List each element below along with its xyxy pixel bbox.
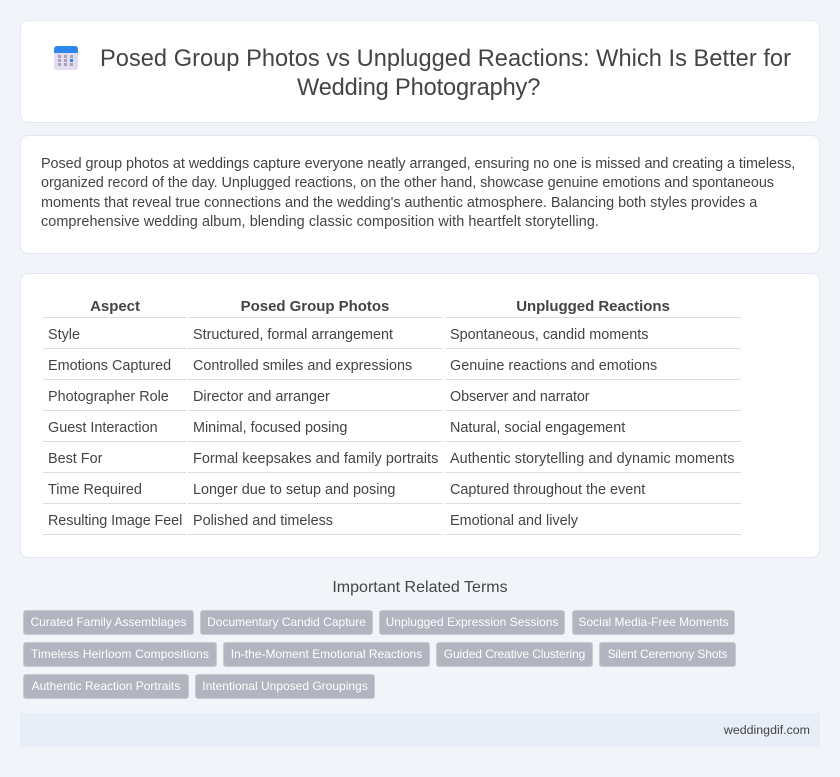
table row: best for: Best For — [48, 451, 102, 467]
table row: resulting image feel: Resulting Image Feel — [48, 513, 182, 529]
related terms tags: Guided Creative Clustering — [444, 647, 585, 661]
icon: calendar — [54, 46, 78, 70]
table row: emotions — [48, 358, 657, 374]
related terms tags: Timeless Heirloom Compositions — [31, 647, 209, 661]
intro paragraph: comprehensive wedding album, blending classic composition with heartfelt storytelling. — [41, 214, 599, 230]
table row: guest interaction — [48, 420, 626, 436]
table row: best for: Authentic storytelling and dynamic moments — [450, 451, 734, 467]
table row: best for — [48, 451, 734, 467]
intro paragraph: organized record of the day. Unplugged reactions, on the other hand, showcase genuine emotions and spontaneous — [41, 175, 774, 191]
table header: Unplugged Reactions — [516, 298, 670, 315]
table header: Posed Group Photos — [241, 298, 389, 315]
heading — [100, 46, 791, 101]
table row: guest interaction: Guest Interaction — [48, 420, 158, 436]
related terms tags: In-the-Moment Emotional Reactions — [231, 647, 422, 661]
related terms tags: Documentary Candid Capture — [207, 615, 366, 629]
heading: Posed Group Photos vs Unplugged Reactions: Which Is Better for — [100, 46, 791, 72]
table row: emotions: Genuine reactions and emotions — [450, 358, 657, 374]
related terms tags: Unplugged Expression Sessions — [386, 615, 558, 629]
related terms tags: Authentic Reaction Portraits — [32, 679, 180, 693]
table header: Aspect — [90, 298, 140, 315]
table row: time required: Captured throughout the event — [450, 482, 645, 498]
table row: resulting image feel — [48, 513, 578, 529]
table row: resulting image feel: Polished and timeless — [193, 513, 333, 529]
comparison table panel — [20, 273, 820, 558]
table row: best for: Formal keepsakes and family portraits — [193, 451, 438, 467]
heading: Wedding Photography? — [297, 75, 540, 101]
table row: style — [48, 327, 648, 343]
table row: style: Spontaneous, candid moments — [450, 327, 648, 343]
table row: guest interaction: Natural, social engagement — [450, 420, 625, 436]
related terms tags: Silent Ceremony Shots — [608, 647, 727, 661]
intro paragraph: Posed group photos at weddings capture everyone neatly arranged, ensuring no one is missed and creating a timeless, — [41, 156, 795, 172]
related terms heading: Important Related Terms — [332, 579, 508, 596]
table header — [90, 298, 670, 315]
intro paragraph: moments that reveal true connections and the wedding's authentic atmosphere. Balancing both styles provides a — [41, 195, 757, 211]
footer source: weddingdif.com — [724, 723, 810, 737]
related terms tags: Curated Family Assemblages — [30, 615, 187, 629]
table row: photographer role: Observer and narrator — [450, 389, 589, 405]
related terms tags: Social Media-Free Moments — [578, 615, 729, 629]
table row: style: Style — [48, 327, 80, 343]
footer — [20, 713, 820, 747]
table row: photographer role: Director and arranger — [193, 389, 330, 405]
related terms tags: Intentional Unposed Groupings — [202, 679, 368, 693]
table row: resulting image feel: Emotional and lively — [450, 513, 578, 529]
table row: photographer role: Photographer Role — [48, 389, 169, 405]
table row: emotions: Emotions Captured — [48, 358, 171, 374]
table row: time required — [48, 482, 646, 498]
table row: time required: Longer due to setup and posing — [193, 482, 395, 498]
intro text panel — [20, 135, 820, 254]
table row: guest interaction: Minimal, focused posing — [193, 420, 347, 436]
table row: style: Structured, formal arrangement — [193, 327, 393, 343]
title card — [20, 20, 820, 123]
table row: time required: Time Required — [48, 482, 142, 498]
intro paragraph — [41, 156, 795, 230]
table row: photographer role — [48, 389, 590, 405]
related terms tags — [23, 610, 736, 699]
table row: emotions: Controlled smiles and expressions — [193, 358, 412, 374]
